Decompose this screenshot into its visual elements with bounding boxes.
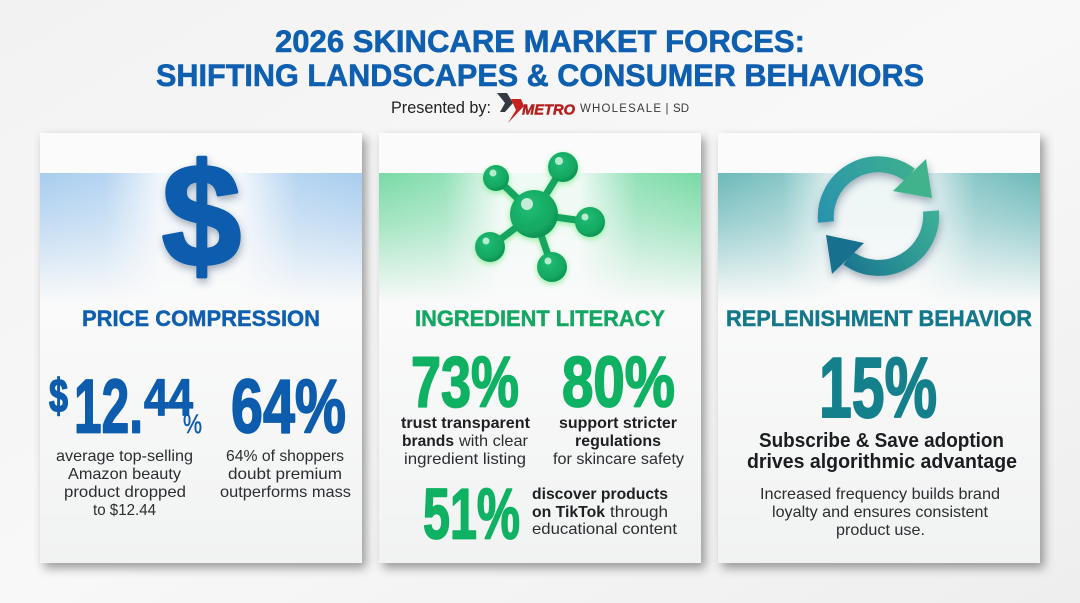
text: stricter regulations: regulations xyxy=(575,433,661,450)
stat: 64%: 64% xyxy=(231,364,346,450)
text: brand loyalty description: Increased frequency builds brand xyxy=(760,486,1000,503)
text: brand loyalty description: product use. xyxy=(836,522,925,539)
title: 2026 SKINCARE MARKET FORCES: xyxy=(275,23,805,59)
text: amazon beauty description: average top-selling xyxy=(56,448,193,465)
text: transparent brands: trust transparent xyxy=(401,415,531,432)
heading: ingredient literacy: INGREDIENT LITERACY xyxy=(415,306,665,331)
text: shoppers description: 64% of shoppers xyxy=(226,448,344,465)
text: transparent brands xyxy=(401,415,531,468)
stat: 51%: 51% xyxy=(423,476,520,554)
text: shoppers description: doubt premium xyxy=(228,466,342,483)
presented by line with logo: WHOLESALE xyxy=(580,103,661,115)
text: amazon beauty description xyxy=(56,448,193,519)
stat: 15%: 15% xyxy=(819,341,937,436)
stat: $12.44 xyxy=(49,364,202,450)
stat: $12.44: $ xyxy=(49,369,68,422)
text: stricter regulations: support stricter xyxy=(559,415,677,432)
text: subscribe and save: Subscribe & Save adoption xyxy=(759,430,1004,452)
text: amazon beauty description: to $12.44 xyxy=(93,502,156,519)
panel: ingredient literacy xyxy=(379,133,701,563)
text: tiktok discovery xyxy=(532,486,678,538)
icon: dollar sign: $ xyxy=(162,134,241,297)
text: shoppers description: outperforms mass xyxy=(220,484,351,501)
text: subscribe and save: drives algorithmic advantage xyxy=(747,451,1017,473)
icon: circular arrows xyxy=(826,159,932,274)
heading: replenishment behavior: REPLENISHMENT BEHAVIOR xyxy=(726,306,1032,331)
stat: 80%: 80% xyxy=(562,344,675,422)
text: transparent brands: brands xyxy=(402,433,454,450)
text: transparent brands: with clear xyxy=(458,433,529,450)
text: subscribe and save xyxy=(747,430,1017,473)
text: tiktok discovery: discover products xyxy=(532,486,668,503)
heading: price compression: PRICE COMPRESSION xyxy=(82,306,320,331)
presented by line with logo xyxy=(391,93,689,123)
text: tiktok discovery: on TikTok xyxy=(532,504,605,521)
presented by line with logo: METRO xyxy=(522,102,575,118)
icon: molecule xyxy=(475,152,605,282)
text: stricter regulations xyxy=(553,415,684,468)
presented by line with logo: Presented by: xyxy=(391,98,491,117)
stat: 73%: 73% xyxy=(411,344,519,422)
stat: $12.44: 44 xyxy=(144,370,193,428)
text: amazon beauty description: product dropped xyxy=(64,484,186,501)
title xyxy=(156,23,924,93)
stat: $12.44: % xyxy=(183,409,202,439)
text: brand loyalty description: loyalty and ensures consistent xyxy=(772,504,989,521)
title: SHIFTING LANDSCAPES & CONSUMER BEHAVIORS xyxy=(156,57,924,93)
text: tiktok discovery: through xyxy=(610,504,668,521)
text: amazon beauty description: Amazon beauty xyxy=(68,466,181,483)
stat: $12.44: 12. xyxy=(74,364,143,450)
text: shoppers description xyxy=(220,448,351,501)
text: stricter regulations: for skincare safety xyxy=(553,451,684,468)
presented by line with logo: SD xyxy=(673,103,689,115)
text: tiktok discovery: educational content xyxy=(532,521,678,538)
text: brand loyalty description xyxy=(760,486,1000,539)
text: transparent brands: ingredient listing xyxy=(404,451,526,468)
panel: replenishment behavior xyxy=(718,133,1040,563)
panel: price compression xyxy=(40,133,362,563)
presented by line with logo: | xyxy=(666,103,668,115)
